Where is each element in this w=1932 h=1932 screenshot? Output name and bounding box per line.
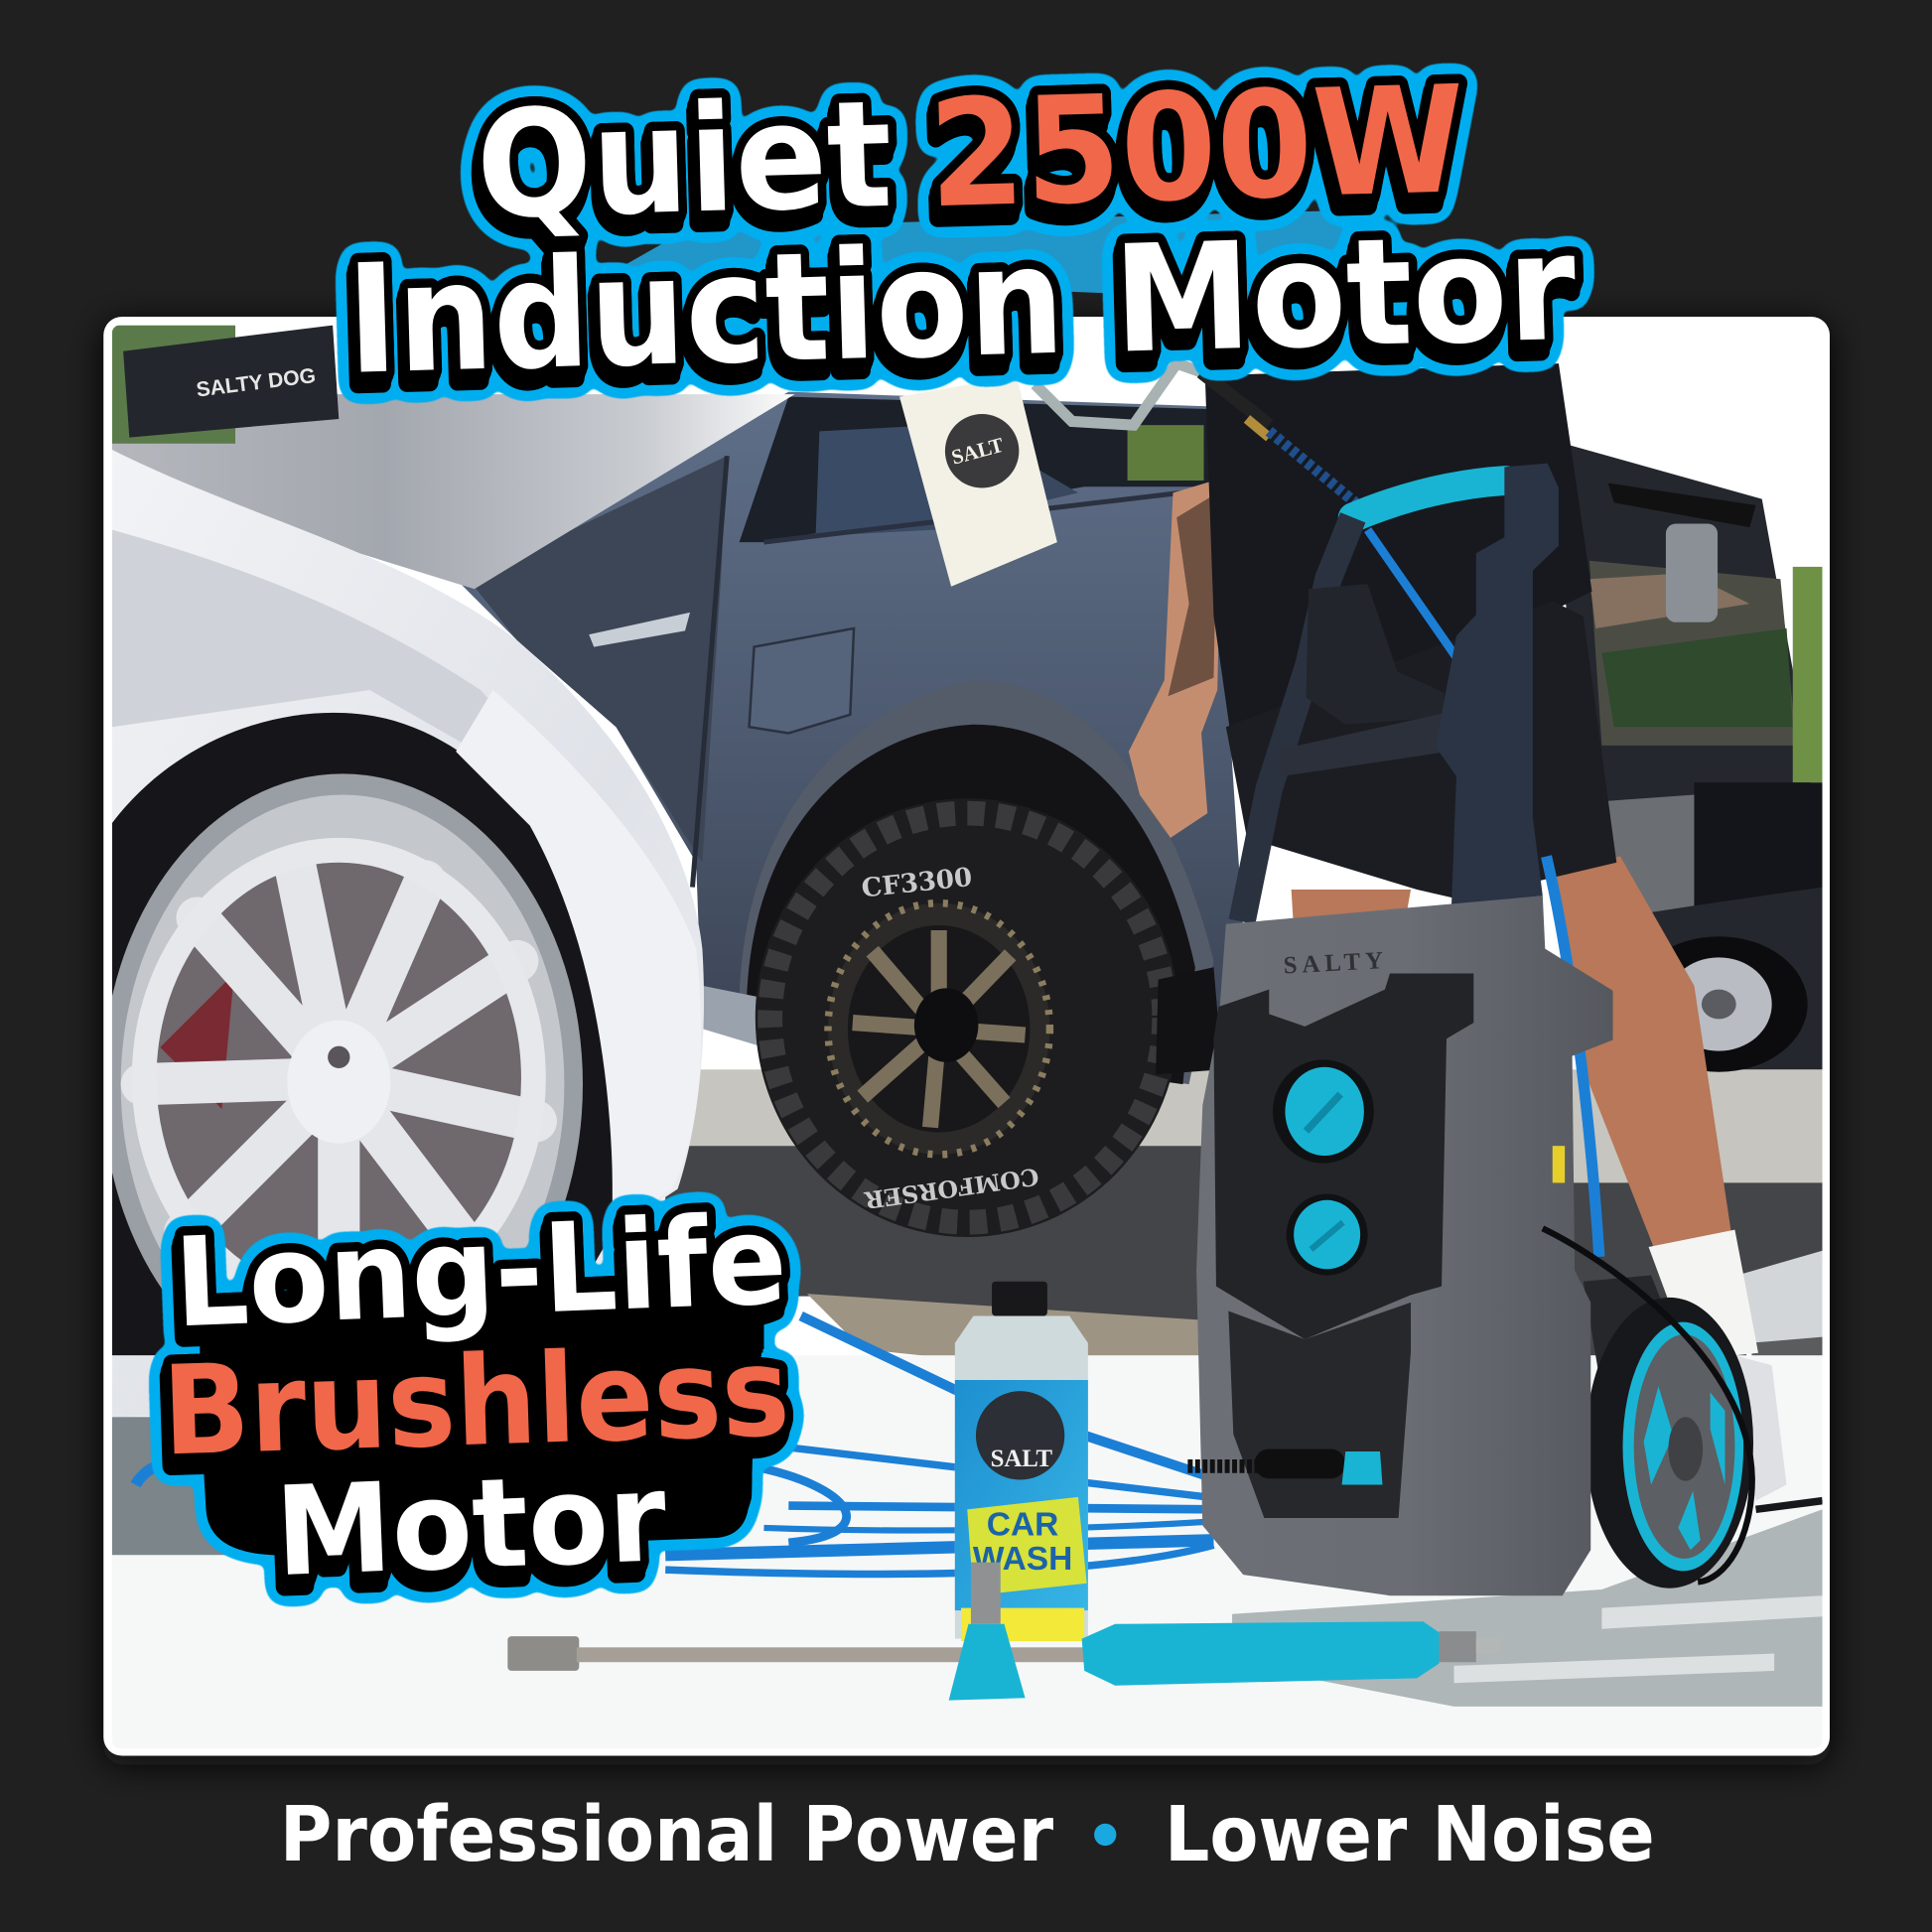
title <box>345 55 1578 408</box>
foam bottle <box>899 376 1057 587</box>
car wash bottle: SALT <box>991 1446 1053 1472</box>
panel shadow <box>103 323 1830 1764</box>
title word: 2500W: 2500W <box>926 55 1467 241</box>
tyre: COMFORSER <box>863 1163 1040 1214</box>
sky <box>112 326 1823 695</box>
trees and banner <box>112 326 339 444</box>
panel: photo frame <box>103 317 1830 1756</box>
shoe <box>1737 1356 1787 1501</box>
car wash bottle <box>955 1282 1088 1641</box>
cable right <box>1756 1501 1823 1509</box>
foam bottle: SALT <box>949 433 1006 470</box>
rear wheel <box>1584 1276 1753 1588</box>
hose outlet <box>1187 1451 1382 1484</box>
dial top <box>1273 1059 1374 1164</box>
trees and banner: SALTY DOG <box>195 364 317 402</box>
wheel arch <box>740 680 1213 1084</box>
main body <box>1196 896 1613 1595</box>
lower recess <box>1228 1303 1411 1518</box>
callout line: Long-Life: Long-Life <box>172 1189 789 1355</box>
shirt <box>1205 363 1591 746</box>
wet patch behind left <box>112 1417 226 1555</box>
callout line: Motor: Motor <box>273 1447 669 1604</box>
road surfaces <box>665 1069 1823 1356</box>
tyre <box>756 798 1179 1237</box>
holder bracket <box>1307 584 1445 725</box>
foam cannon <box>949 1563 1026 1701</box>
wand <box>507 1621 1501 1686</box>
callout backing <box>204 1269 763 1543</box>
tyre: CF3300 <box>860 863 974 903</box>
title word: Motor: Motor <box>1111 203 1578 387</box>
pressure washer <box>1156 464 1823 1595</box>
wheel arch <box>112 713 613 1355</box>
power cable <box>1543 1228 1752 1583</box>
warning sticker <box>1553 1146 1565 1182</box>
footer tagline <box>280 1791 1655 1879</box>
footer separator dot <box>1094 1824 1116 1846</box>
grey truck <box>456 392 1247 1237</box>
wet ground <box>112 1355 1823 1749</box>
title word: Quiet: Quiet <box>475 69 895 252</box>
handle grip <box>1353 481 1506 517</box>
foam on fender <box>456 690 701 1232</box>
callout: long-life brushless motor <box>160 1189 791 1604</box>
white foamed car <box>102 450 704 1417</box>
person <box>1129 363 1787 1501</box>
car wash bottle: CAR <box>987 1506 1058 1543</box>
left clip <box>1156 967 1222 1074</box>
left frame arm <box>1242 517 1353 921</box>
wet concrete right <box>1232 1509 1823 1707</box>
blue hose on ground <box>136 530 1599 1575</box>
dial bottom <box>1287 1194 1368 1276</box>
cross bar <box>1282 712 1448 776</box>
car wash bottle: WASH <box>973 1541 1072 1578</box>
handle tower <box>1436 464 1559 905</box>
control panel <box>1213 973 1473 1339</box>
footer text: lower noise: Lower Noise <box>1165 1791 1655 1879</box>
sock <box>1649 1230 1758 1360</box>
body logo: SALTY <box>1283 947 1389 979</box>
arm <box>1129 479 1222 838</box>
rear truck <box>1555 441 1823 1072</box>
title backing <box>610 209 1399 293</box>
foamed tyre <box>111 773 583 1289</box>
panel: pressure washer photo <box>102 326 1823 1749</box>
rim <box>142 850 536 1307</box>
leg behind frame <box>1291 890 1411 918</box>
shorts <box>1226 602 1616 899</box>
foam lance and bottle <box>899 363 1355 587</box>
arm tattoo <box>1169 492 1217 696</box>
callout line: Brushless: Brushless <box>160 1321 791 1483</box>
leg <box>1555 857 1731 1247</box>
footer text: professional power: Professional Power <box>280 1791 1053 1879</box>
title word: Induction: Induction <box>345 212 1066 408</box>
spray mist <box>112 394 794 589</box>
right tree <box>1793 567 1823 782</box>
